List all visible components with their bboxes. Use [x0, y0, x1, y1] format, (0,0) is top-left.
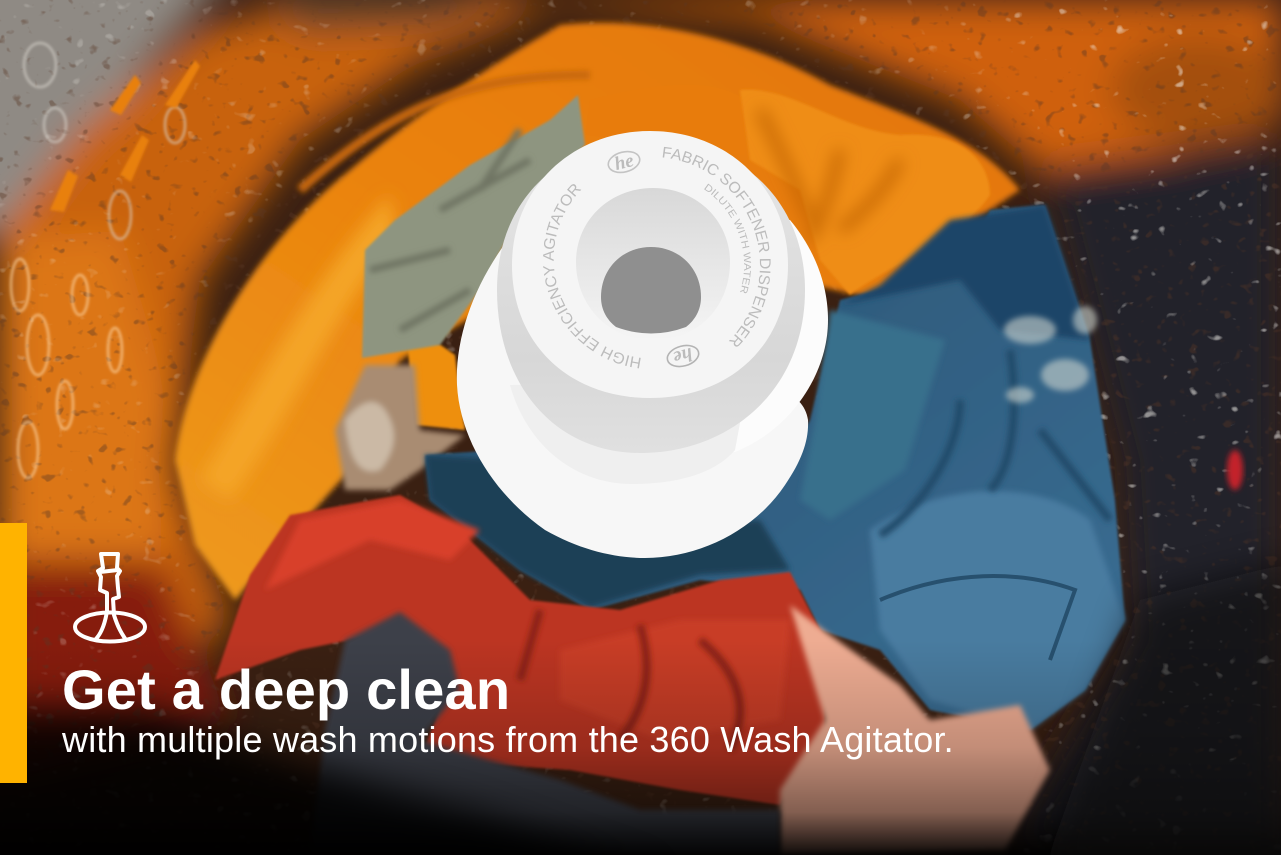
- agitator: grey body: [497, 140, 805, 453]
- laundry: olive shirt: [362, 95, 585, 358]
- agitator: moulded text: [543, 146, 771, 368]
- agitator: moulded text: FABRIC SOFTENER DISPENSER: [662, 146, 771, 347]
- agitator: translucent collar: [510, 380, 748, 484]
- agitator: funnel: [576, 188, 730, 340]
- laundry: splash of water: [335, 365, 465, 490]
- laundry: orange garment: [175, 23, 1020, 600]
- laundry: dark jeans: [310, 612, 780, 855]
- dark gradient overlay: [0, 560, 1281, 855]
- agitator: moulded text: DILUTE WITH WATER: [704, 184, 751, 294]
- laundry: red garment: [215, 495, 825, 805]
- agitator: moulded text: he: [612, 150, 636, 175]
- agitator: upper base disc: [640, 220, 828, 452]
- agitator: top ring: [512, 131, 788, 398]
- agitator: moulded text: HIGH EFFICIENCY AGITATOR: [543, 184, 641, 368]
- icon: agitator: [73, 552, 147, 644]
- laundry: blue denim jeans: [425, 205, 1125, 730]
- laundry: pink garment: [780, 605, 1050, 855]
- accent bar: [0, 523, 27, 783]
- agitator: centre hole: [601, 247, 701, 334]
- agitator: lower base disc: [457, 245, 808, 558]
- heading: Get a deep clean: [62, 658, 510, 721]
- subheading: with multiple wash motions from the 360 Wash Agitator.: [62, 719, 954, 760]
- agitator: moulded text: he: [670, 343, 695, 368]
- agitator: [456, 131, 828, 558]
